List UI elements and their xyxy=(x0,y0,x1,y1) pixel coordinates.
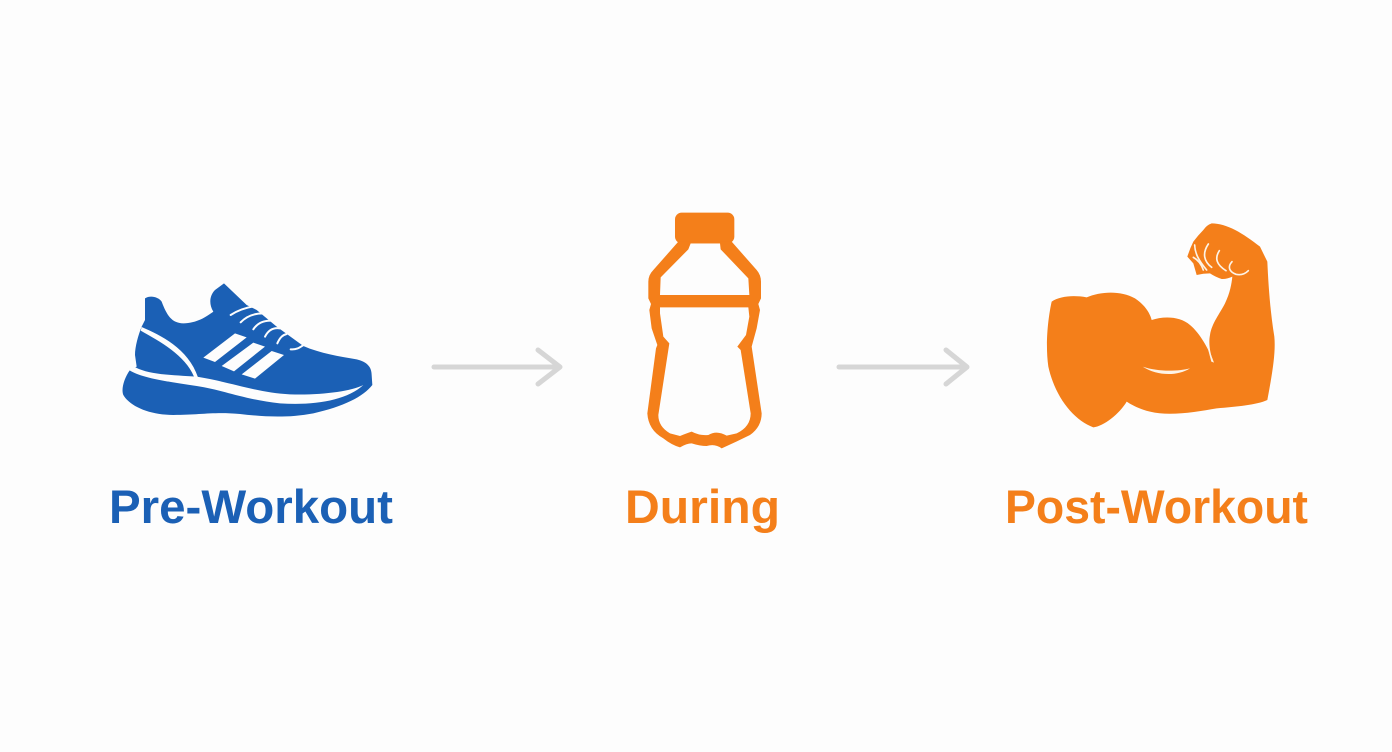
arrow: during to post-workout xyxy=(839,350,967,384)
label: Pre-Workout: Pre-Workout xyxy=(109,480,393,533)
icon: water bottle xyxy=(647,213,762,448)
icon: flexed arm muscle xyxy=(1047,223,1275,427)
label: During: During xyxy=(625,480,780,533)
icon: running shoe xyxy=(123,283,372,417)
label: Post-Workout: Post-Workout xyxy=(1005,480,1308,533)
arrow: pre-workout to during xyxy=(434,350,560,384)
